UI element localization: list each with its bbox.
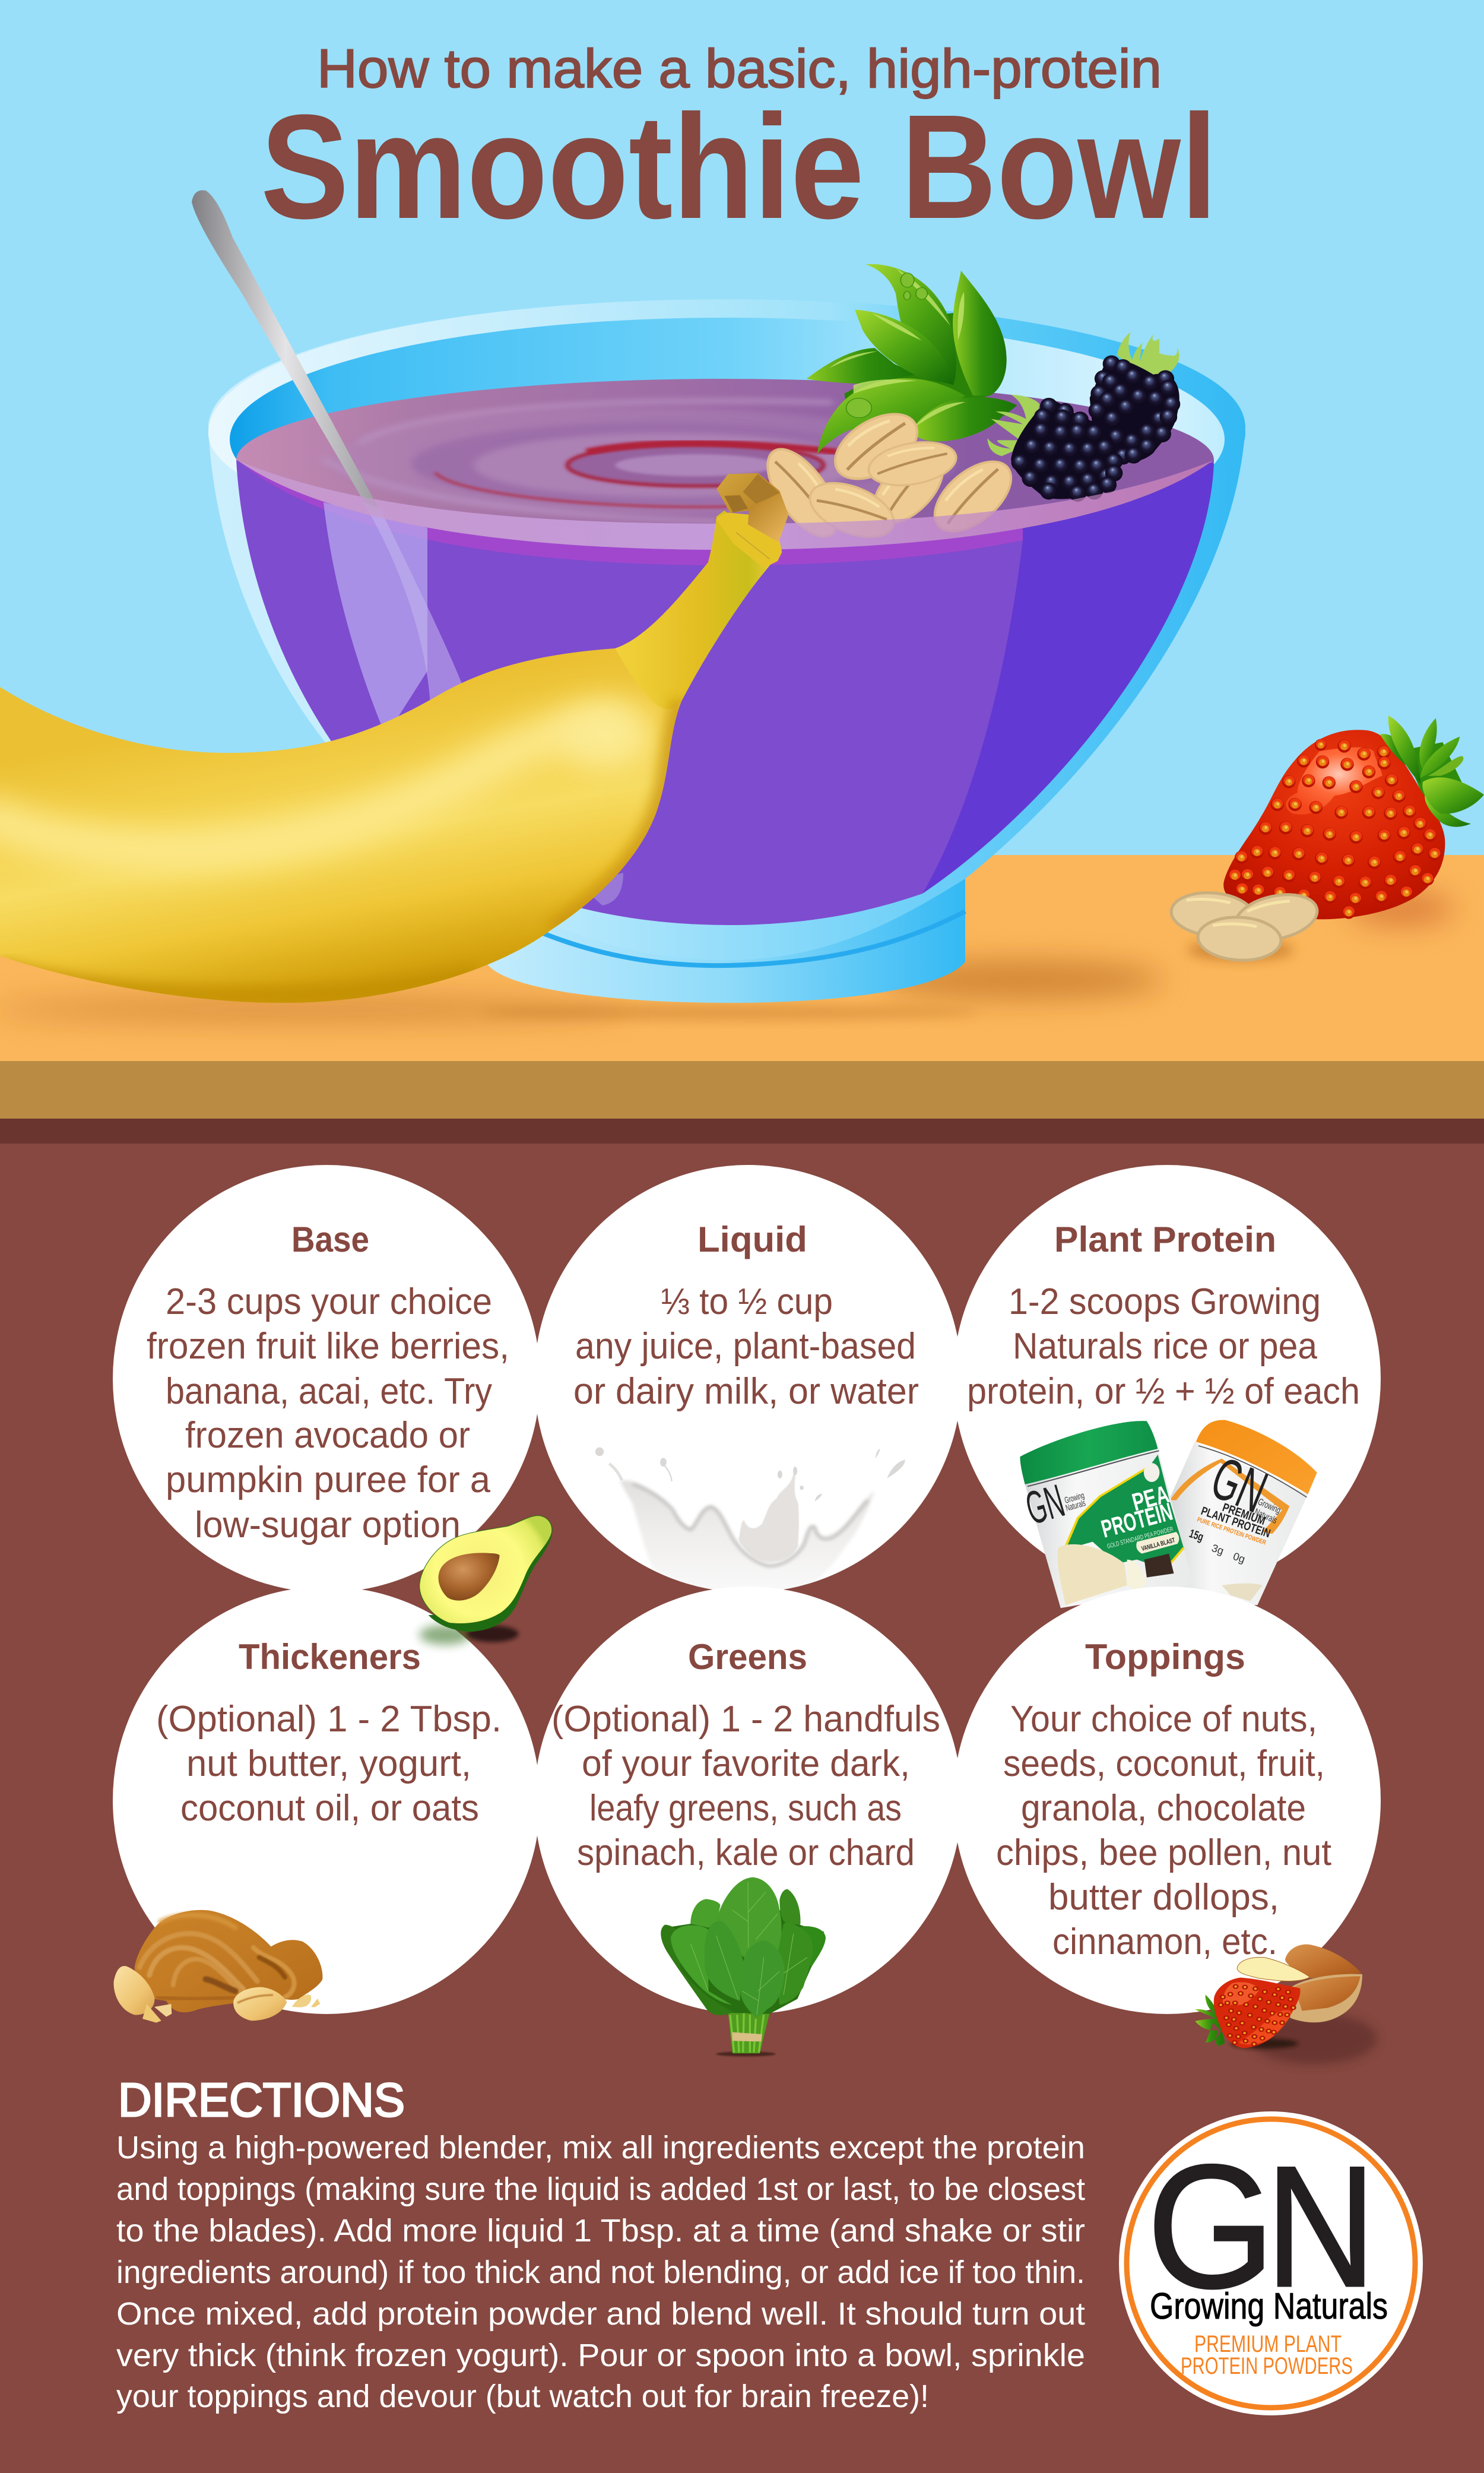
- table shadows under bowl and banana: [0, 961, 1163, 1021]
- logo GN letters: N: [1266, 2130, 1376, 2323]
- purple smoothie body: [236, 460, 1214, 925]
- icon: orange rice protein tub: Growing: [1256, 1497, 1282, 1516]
- text block: base: frozen fruit like berries,: [147, 1326, 509, 1367]
- bowl inner wall: [230, 318, 1225, 561]
- banana stem tip: [716, 473, 788, 568]
- panel: plant protein circle: [953, 1165, 1381, 1592]
- bowl lower edge line: [539, 911, 965, 965]
- text block: thickeners: coconut oil, or oats: [180, 1788, 479, 1829]
- panel: greens circle: [534, 1587, 962, 2014]
- icon: orange rice protein tub: [1169, 1420, 1317, 1605]
- text block: thickeners: [156, 1637, 502, 1829]
- banana highlights and shading: [0, 701, 681, 996]
- text block: liquid: ⅓ to ½ cup: [661, 1281, 833, 1322]
- text block: greens: leafy greens, such as: [589, 1788, 902, 1829]
- text block: plant protein: protein, or ½ + ½ of each: [967, 1371, 1360, 1412]
- text block: base: frozen avocado or: [185, 1415, 470, 1456]
- icon: green pea protein tub: [1020, 1421, 1194, 1608]
- strawberry shadow: [1347, 892, 1454, 925]
- table oats: [1169, 888, 1321, 962]
- spinach veins: [690, 1882, 807, 2015]
- bowl rim: [208, 299, 1245, 564]
- icon: orange rice protein tub: 15g: [1187, 1527, 1205, 1544]
- logo circle: [1119, 2111, 1423, 2415]
- text block: toppings: butter dollops,: [1048, 1877, 1279, 1918]
- directions text: Using a high-powered blender, mix all ingredients except the protein: [116, 2130, 1085, 2165]
- icon: milk splash: [595, 1448, 905, 1595]
- panel: toppings circle: [953, 1587, 1381, 2014]
- directions text: to the blades). Add more liquid 1 Tbsp. at a time (and shake or stir: [116, 2213, 1085, 2249]
- text block: greens: spinach, kale or chard: [577, 1832, 915, 1873]
- logo tagline: [1181, 2331, 1353, 2379]
- directions text: very thick (think frozen yogurt). Pour or spoon into a bowl, sprinkle: [116, 2338, 1085, 2373]
- spinach leaf mass backing: [665, 1878, 824, 2014]
- text block: toppings: cinnamon, etc.: [1052, 1921, 1277, 1962]
- panel: base circle: [113, 1165, 540, 1592]
- pale left reflection: [324, 502, 427, 736]
- icon: peanut butter: [114, 1910, 322, 2023]
- icon: green pea protein tub: Growing: [1063, 1490, 1086, 1506]
- smoothie swirl: [322, 401, 956, 521]
- icon: orange rice protein tub: 0g: [1232, 1550, 1247, 1565]
- text block: greens: (Optional) 1 - 2 handfuls: [551, 1699, 940, 1740]
- logo tagline: PREMIUM PLANT: [1194, 2331, 1342, 2357]
- icon: orange rice protein tub: Naturals: [1252, 1507, 1279, 1526]
- rolled oats on smoothie: [754, 401, 1023, 548]
- panel: lower row circles: [113, 1587, 1381, 2014]
- text block: toppings: granola, chocolate: [1021, 1788, 1306, 1829]
- title: Smoothie Bowl: [261, 84, 1217, 249]
- text block: thickeners: Thickeners: [239, 1637, 421, 1677]
- text block: greens: [551, 1637, 940, 1873]
- directions text: your toppings and devour (but watch out for brain freeze)!: [116, 2379, 929, 2414]
- strawberry leaves: [1380, 734, 1407, 766]
- text block: base: pumpkin puree for a: [166, 1459, 491, 1500]
- text block: thickeners: nut butter, yogurt,: [186, 1743, 471, 1784]
- text block: toppings: seeds, coconut, fruit,: [1003, 1743, 1325, 1784]
- magenta band: [237, 460, 1213, 565]
- submerged spoon: [363, 502, 463, 707]
- directions text: Once mixed, add protein powder and blend well. It should turn out: [116, 2296, 1085, 2332]
- icon: orange rice protein tub: PREMIUM: [1220, 1501, 1267, 1528]
- text block: base: banana, acai, etc. Try: [166, 1371, 492, 1412]
- text block: base: low-sugar option: [195, 1505, 461, 1546]
- spinach stems: [728, 2013, 770, 2053]
- directions text: [116, 2130, 1085, 2414]
- text block: plant protein: Plant Protein: [1054, 1220, 1276, 1259]
- strawberry: [1223, 715, 1484, 919]
- text block: toppings: Toppings: [1085, 1637, 1245, 1677]
- logo orange ring: [1127, 2119, 1415, 2408]
- text block: toppings: chips, bee pollen, nut: [996, 1832, 1331, 1873]
- table shadow band: [0, 1119, 1484, 1144]
- panel: upper row circles: [113, 1165, 1381, 1592]
- text block: toppings: Your choice of nuts,: [1010, 1699, 1317, 1740]
- text block: thickeners: (Optional) 1 - 2 Tbsp.: [156, 1699, 502, 1740]
- icon: orange rice protein tub: 3g: [1210, 1542, 1225, 1557]
- small strawberry leaves: [1195, 1994, 1225, 2045]
- text block: greens: of your favorite dark,: [582, 1743, 910, 1784]
- toppings shadow: [1251, 2013, 1377, 2064]
- icon: green pea protein tub: PROTEIN: [1098, 1497, 1175, 1543]
- sky background: [0, 0, 1484, 855]
- icon: green pea protein tub: Naturals: [1064, 1498, 1087, 1513]
- logo GN letters: [1147, 2128, 1376, 2325]
- icon: orange rice protein tub: PLANT PROTEIN: [1199, 1505, 1272, 1540]
- smoothie surface: [236, 379, 1214, 524]
- peanut butter swirl: [135, 1910, 322, 2012]
- almonds: [1285, 1945, 1361, 1978]
- oats shadow: [1187, 939, 1294, 961]
- banana body: [0, 511, 782, 1003]
- glass bowl: [192, 190, 1245, 1003]
- logo badge: [1119, 2111, 1423, 2415]
- bowl foot: [488, 861, 965, 1003]
- directions text: ingredients around) if too thick and not blending, or add ice if too thin.: [116, 2254, 1085, 2290]
- logo GN letters: G: [1147, 2128, 1275, 2325]
- banana: [0, 473, 788, 1003]
- text block: plant protein: [967, 1220, 1360, 1412]
- icon: orange rice protein tub: PURE RICE PROTEIN POWDER: [1196, 1516, 1267, 1547]
- text block: base: Base: [291, 1220, 369, 1259]
- text block: liquid: [573, 1220, 919, 1412]
- leaf sprig: [807, 264, 1017, 454]
- logo brand name: Growing Naturals: [1150, 2286, 1388, 2327]
- directions heading: DIRECTIONS: [118, 2073, 405, 2126]
- protein tubs: [1020, 1420, 1317, 1608]
- table top: [0, 855, 1484, 1061]
- text block: base: 2-3 cups your choice: [166, 1281, 492, 1322]
- icon: spinach bunch: [661, 1877, 826, 2056]
- panel: liquid circle: [534, 1165, 962, 1592]
- glass front band overlay: [237, 460, 1213, 550]
- icon: toppings nuts and strawberry: [1195, 1945, 1377, 2064]
- almond halve: [1237, 1957, 1310, 1981]
- strawberry and oats on table: [1169, 715, 1484, 962]
- blackberry calyx: [1117, 332, 1179, 375]
- icon: green pea protein tub: VANILLA BLAST: [1141, 1537, 1176, 1553]
- logo tagline: PROTEIN POWDERS: [1181, 2353, 1353, 2379]
- directions text: and toppings (making sure the liquid is added 1st or last, to be closest: [116, 2171, 1085, 2207]
- text block: toppings: [996, 1637, 1331, 1962]
- spinach leaves: [779, 1889, 800, 1925]
- text block: greens: Greens: [688, 1637, 807, 1677]
- text block: liquid: or dairy milk, or water: [573, 1371, 919, 1412]
- text block: liquid: any juice, plant-based: [575, 1326, 916, 1367]
- blackberries: [987, 332, 1180, 502]
- text block: base: [147, 1220, 509, 1546]
- strawberry back leaves: [1403, 742, 1467, 821]
- subtitle: How to make a basic, high-protein: [317, 39, 1162, 99]
- table edge: [0, 1061, 1484, 1119]
- text block: liquid: Liquid: [697, 1220, 807, 1259]
- icon: avocado: [420, 1516, 553, 1645]
- spoon ghost near banana: [579, 873, 623, 905]
- icon: green pea protein tub: GOLD STANDARD PEA POWDER: [1106, 1526, 1174, 1550]
- panel: thickeners circle: [113, 1587, 540, 2014]
- text block: plant protein: 1-2 scoops Growing: [1009, 1281, 1321, 1322]
- small strawberry: [1214, 1978, 1300, 2048]
- bowl glass body: [208, 299, 1245, 960]
- text block: plant protein: Naturals rice or pea: [1013, 1326, 1317, 1367]
- brown lower panel: [0, 1144, 1484, 2473]
- peanut halves: [114, 1966, 154, 2015]
- smoothie front band solid: [237, 460, 1213, 550]
- berry cluster lower: [1011, 399, 1118, 499]
- berry cluster upper: [1090, 359, 1179, 462]
- icon: green pea protein tub: PEA: [1129, 1480, 1172, 1516]
- icon: orange rice protein tub: GN: [1203, 1445, 1276, 1525]
- spoon in bowl: [192, 190, 380, 511]
- icon: green pea protein tub: GN: [1020, 1474, 1070, 1534]
- banana stem shading: [615, 511, 782, 709]
- darker right side of smoothie: [922, 463, 1214, 894]
